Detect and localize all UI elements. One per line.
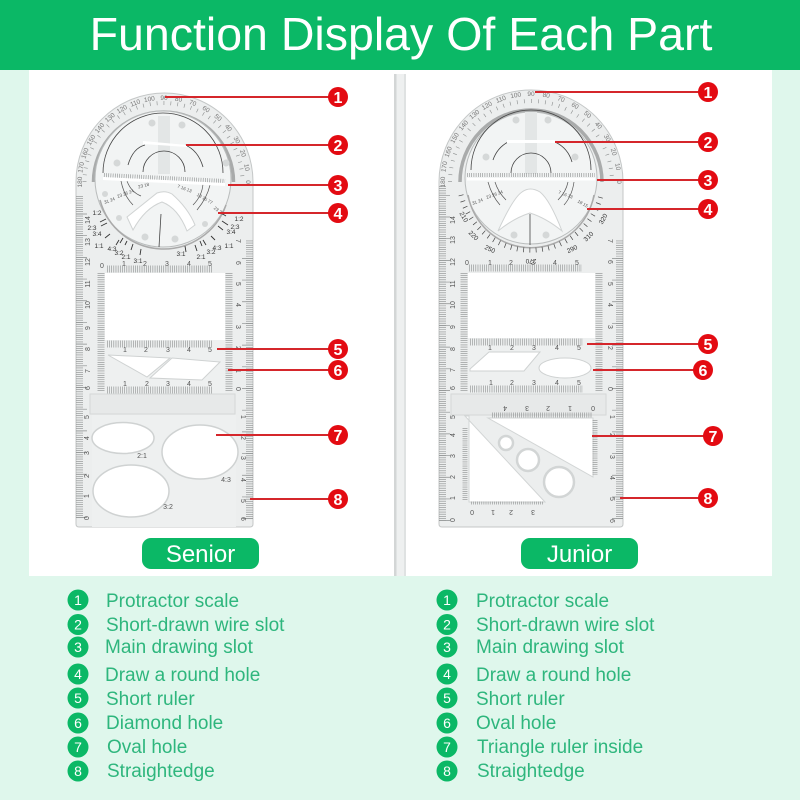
inner arcs and slots: 23 26 24 bbox=[485, 189, 504, 200]
protractor numbers: 160 bbox=[80, 147, 91, 160]
side scales: 7 bbox=[606, 239, 613, 243]
item 1: Protractor scale bbox=[106, 591, 239, 612]
protractor numbers: 0 bbox=[615, 180, 622, 184]
side scales: 1 bbox=[234, 369, 241, 373]
triangle ruler inside: 2 bbox=[509, 508, 513, 515]
protractor numbers: 140 bbox=[458, 119, 470, 132]
window with rulers: 4 bbox=[553, 260, 557, 267]
elliptical holes: 3:2 bbox=[163, 504, 173, 511]
item 3: 3 bbox=[443, 639, 451, 655]
protractor numbers: 0 bbox=[244, 180, 251, 184]
item 3: 3 bbox=[74, 639, 82, 655]
item 3: Main drawing slot bbox=[105, 637, 254, 658]
window with rulers: 0 bbox=[591, 404, 595, 411]
protractor numbers: 50 bbox=[582, 110, 593, 120]
callout 3: 3 bbox=[704, 173, 713, 190]
ratio labels: 2:3 bbox=[230, 224, 240, 231]
protractor numbers: 90 bbox=[527, 91, 535, 98]
callout 3: 3 bbox=[334, 178, 343, 195]
side scales: 1 bbox=[84, 494, 91, 498]
ratio labels: 1:2 bbox=[92, 210, 102, 217]
item 4: Draw a round hole bbox=[105, 665, 260, 686]
item 7: Oval hole bbox=[107, 737, 187, 758]
side scales: 13 bbox=[450, 236, 457, 244]
side scales: 12 bbox=[85, 258, 92, 266]
inner arcs and slots: 23 26 24 bbox=[116, 188, 135, 199]
item 8: 8 bbox=[443, 763, 451, 779]
callout 6: 6 bbox=[699, 363, 708, 380]
protractor numbers bbox=[440, 91, 622, 187]
callout 2: 2 bbox=[334, 138, 343, 155]
window with rulers: 2 bbox=[510, 380, 514, 387]
window with rulers: 5 bbox=[208, 261, 212, 268]
protractor numbers: 90 bbox=[160, 95, 168, 102]
callout 2 bbox=[186, 135, 348, 155]
window with rulers: 4 bbox=[555, 345, 559, 352]
callout 5 bbox=[587, 334, 718, 354]
side scales: 14 bbox=[85, 216, 92, 224]
protractor numbers: 100 bbox=[510, 91, 522, 100]
side scales: 2 bbox=[239, 436, 246, 440]
protractor numbers: 120 bbox=[481, 100, 494, 112]
ratio labels: 1:2 bbox=[234, 216, 244, 223]
item 6 bbox=[436, 712, 556, 734]
protractor numbers: 40 bbox=[223, 123, 233, 134]
side scales: 6 bbox=[239, 517, 246, 521]
side scales bbox=[442, 186, 620, 523]
protractor numbers: 80 bbox=[542, 92, 551, 100]
side scales: 8 bbox=[450, 347, 457, 351]
protractor numbers: 130 bbox=[104, 112, 117, 124]
ratio labels: 4:3 bbox=[212, 245, 222, 252]
side scales: 2 bbox=[606, 346, 613, 350]
protractor numbers: 60 bbox=[570, 101, 580, 111]
inner arcs and slots bbox=[467, 110, 595, 248]
callout 2 bbox=[555, 132, 718, 152]
callout 1 bbox=[535, 82, 718, 102]
callouts: junior bbox=[535, 82, 723, 508]
item 5 bbox=[436, 688, 565, 710]
item 4: Draw a round hole bbox=[476, 665, 631, 686]
window with rulers: 3 bbox=[166, 381, 170, 388]
side scales: 9 bbox=[85, 326, 92, 330]
side scales: 0 bbox=[234, 387, 241, 391]
side scales: 11 bbox=[450, 280, 457, 288]
callout 5: 5 bbox=[334, 342, 343, 359]
side scales: 2 bbox=[450, 475, 457, 479]
item 7: 7 bbox=[443, 739, 451, 755]
callout 4: 4 bbox=[704, 202, 713, 219]
protractor numbers: 170 bbox=[440, 160, 449, 173]
side scales: 5 bbox=[234, 282, 241, 286]
protractor numbers: 50 bbox=[213, 113, 223, 123]
window with rulers: 2 bbox=[145, 381, 149, 388]
triangle ruler inside: 3 bbox=[531, 508, 535, 515]
elliptical holes: 4:3 bbox=[221, 477, 231, 484]
triangle ruler inside: 0 bbox=[470, 508, 474, 515]
item 1: Protractor scale bbox=[476, 591, 609, 612]
protractor numbers: 170 bbox=[77, 161, 86, 173]
item 7: 7 bbox=[74, 739, 82, 755]
protractor numbers: 60 bbox=[201, 105, 211, 115]
header banner bbox=[0, 0, 800, 70]
side scales: 6 bbox=[234, 261, 241, 265]
side scales: 3 bbox=[239, 456, 246, 460]
item 1: 1 bbox=[443, 592, 451, 608]
side scales: 3 bbox=[450, 454, 457, 458]
side scales: 4 bbox=[608, 476, 615, 480]
ratio labels: 3:4 bbox=[226, 229, 236, 236]
side scales bbox=[80, 196, 250, 521]
side scales: 5 bbox=[84, 415, 91, 419]
callout 4 bbox=[587, 199, 718, 219]
protractor numbers: 40 bbox=[593, 121, 603, 131]
window with rulers: 4 bbox=[187, 261, 191, 268]
side scales: 3 bbox=[234, 325, 241, 329]
protractor numbers: 70 bbox=[556, 95, 566, 104]
inner arcs and slots: 18 15 77 bbox=[196, 192, 214, 205]
item 2: Short-drawn wire slot bbox=[476, 615, 655, 636]
side scales: 1 bbox=[450, 496, 457, 500]
side scales: 4 bbox=[84, 436, 91, 440]
window with rulers: 3 bbox=[165, 261, 169, 268]
item 4: 4 bbox=[443, 666, 451, 682]
ratio labels: 4:3 bbox=[107, 246, 117, 253]
protractor numbers: 100 bbox=[144, 95, 156, 104]
legend: junior bbox=[436, 590, 655, 782]
inner arcs and slots: 31 24 bbox=[103, 196, 116, 205]
lower degree scale: 310 bbox=[583, 230, 596, 243]
window with rulers: 3 bbox=[532, 380, 536, 387]
lower degree scale: 290 bbox=[566, 244, 579, 255]
callout 6 bbox=[228, 360, 348, 380]
item 2: 2 bbox=[74, 616, 82, 632]
ratio labels: 3:2 bbox=[206, 249, 216, 256]
item 8: Straightedge bbox=[477, 761, 585, 782]
side scales: 7 bbox=[450, 368, 457, 372]
side scales: 8 bbox=[85, 347, 92, 351]
window with rulers: 4 bbox=[503, 404, 507, 411]
callout 5: 5 bbox=[704, 337, 713, 354]
side scales: 7 bbox=[234, 239, 241, 243]
window with rulers: 1 bbox=[489, 380, 493, 387]
window with rulers: 1 bbox=[123, 381, 127, 388]
window with rulers: 2 bbox=[546, 404, 550, 411]
label: Senior bbox=[142, 538, 259, 569]
protractor numbers: 70 bbox=[188, 99, 198, 108]
protractor numbers: 180 bbox=[440, 176, 447, 187]
item 6: Diamond hole bbox=[106, 713, 223, 734]
side scales: 7 bbox=[85, 369, 92, 373]
side scales: 13 bbox=[85, 238, 92, 246]
side scales: 10 bbox=[85, 301, 92, 309]
window with rulers: 1 bbox=[123, 347, 127, 354]
window with rulers: 3 bbox=[525, 404, 529, 411]
protractor numbers: 20 bbox=[238, 149, 247, 158]
callout 1: 1 bbox=[704, 85, 713, 102]
window with rulers: 4 bbox=[187, 381, 191, 388]
protractor numbers: 30 bbox=[231, 135, 241, 145]
callouts: senior bbox=[165, 87, 348, 509]
item 7: Triangle ruler inside bbox=[477, 737, 643, 758]
item 6: 6 bbox=[443, 715, 451, 731]
item 5 bbox=[68, 688, 195, 710]
ruler: junior bbox=[439, 90, 623, 527]
protractor numbers: 110 bbox=[495, 95, 507, 105]
window with rulers: 1 bbox=[488, 260, 492, 267]
callout 6: 6 bbox=[334, 363, 343, 380]
protractor numbers: 130 bbox=[468, 109, 481, 121]
label: Junior bbox=[521, 538, 638, 569]
item 2: 2 bbox=[443, 616, 451, 632]
side scales: 0 bbox=[450, 518, 457, 522]
item 5: 5 bbox=[443, 690, 451, 706]
side scales: 1 bbox=[239, 415, 246, 419]
panel: white product area bbox=[29, 70, 772, 576]
callout 4: 4 bbox=[334, 206, 343, 223]
window with rulers: 0 bbox=[465, 260, 469, 267]
protractor numbers: 30 bbox=[602, 133, 612, 143]
window with rulers bbox=[90, 261, 235, 414]
side scales: 2 bbox=[234, 346, 241, 350]
window with rulers: 1 bbox=[568, 404, 572, 411]
protractor numbers: 180 bbox=[77, 176, 84, 187]
callout 8 bbox=[250, 489, 348, 509]
lower degree scale: 270 bbox=[525, 257, 536, 264]
protractor numbers: 80 bbox=[174, 96, 183, 104]
callout 3 bbox=[228, 175, 348, 195]
side scales: 14 bbox=[450, 216, 457, 224]
item 5: Short ruler bbox=[106, 689, 195, 710]
window with rulers: 1 bbox=[488, 345, 492, 352]
side scales: 0 bbox=[606, 387, 613, 391]
window with rulers: 4 bbox=[187, 347, 191, 354]
callout 7 bbox=[216, 425, 348, 445]
protractor numbers: 150 bbox=[449, 131, 461, 145]
protractor numbers: 10 bbox=[242, 163, 250, 172]
window with rulers: 5 bbox=[208, 347, 212, 354]
protractor numbers: 120 bbox=[116, 104, 129, 115]
triangle ruler inside bbox=[465, 415, 595, 515]
window with rulers: 3 bbox=[531, 260, 535, 267]
side scales: 10 bbox=[450, 301, 457, 309]
side scales: 3 bbox=[606, 325, 613, 329]
protractor numbers: 160 bbox=[444, 145, 454, 158]
item 5: Short ruler bbox=[476, 689, 565, 710]
side scales: 5 bbox=[450, 415, 457, 419]
callout 8: 8 bbox=[704, 491, 713, 508]
callout 7: 7 bbox=[709, 429, 718, 446]
header banner: Function Display Of Each Part bbox=[90, 8, 712, 60]
side scales: 4 bbox=[234, 303, 241, 307]
window with rulers bbox=[451, 260, 606, 415]
protractor numbers: 10 bbox=[613, 163, 621, 171]
callout 8 bbox=[620, 488, 718, 508]
protractor numbers: 140 bbox=[94, 122, 106, 135]
ratio labels: 2:1 bbox=[121, 254, 131, 261]
window with rulers: 2 bbox=[144, 347, 148, 354]
window with rulers: 2 bbox=[143, 261, 147, 268]
side scales: 5 bbox=[608, 497, 615, 501]
window with rulers: 2 bbox=[509, 260, 513, 267]
callout 7 bbox=[592, 426, 723, 446]
window with rulers: 5 bbox=[577, 380, 581, 387]
callout 4 bbox=[218, 203, 348, 223]
side scales: 0 bbox=[84, 516, 91, 520]
item 8: Straightedge bbox=[107, 761, 215, 782]
side scales: 4 bbox=[450, 433, 457, 437]
callout 5 bbox=[217, 339, 348, 359]
ratio labels: 1:1 bbox=[224, 243, 234, 250]
lower degree scale: 250 bbox=[483, 244, 496, 255]
label: Junior: Junior bbox=[547, 541, 612, 568]
label: Senior: Senior bbox=[166, 541, 235, 568]
triangle ruler inside: 1 bbox=[491, 508, 495, 515]
ratio labels: 3:1 bbox=[133, 258, 143, 265]
item 6: 6 bbox=[74, 715, 82, 731]
item 7 bbox=[68, 736, 187, 758]
callout 3 bbox=[597, 170, 718, 190]
callout 1 bbox=[165, 87, 348, 107]
window with rulers: 2 bbox=[510, 345, 514, 352]
ratio labels: 2:1 bbox=[196, 254, 206, 261]
side scales: 5 bbox=[239, 499, 246, 503]
inner arcs and slots: 7 16 13 bbox=[177, 184, 193, 194]
side scales: 3 bbox=[608, 455, 615, 459]
side scales: 2 bbox=[608, 433, 615, 437]
ruler: senior bbox=[76, 93, 253, 527]
ratio labels bbox=[87, 210, 244, 265]
window with rulers: 4 bbox=[555, 380, 559, 387]
inner arcs and slots: 31 24 bbox=[471, 197, 484, 206]
inner arcs and slots: 23 18 bbox=[138, 182, 150, 189]
legend: senior bbox=[68, 590, 285, 782]
callout 8: 8 bbox=[334, 492, 343, 509]
item 8: 8 bbox=[74, 763, 82, 779]
inner arcs and slots: 7 16 13 bbox=[558, 190, 574, 200]
window with rulers: 5 bbox=[208, 381, 212, 388]
side scales: 6 bbox=[606, 260, 613, 264]
window with rulers: 1 bbox=[122, 261, 126, 268]
window with rulers: 5 bbox=[577, 345, 581, 352]
protractor numbers: 110 bbox=[129, 98, 142, 109]
item 3: Main drawing slot bbox=[476, 637, 625, 658]
side scales: 9 bbox=[450, 325, 457, 329]
window with rulers: 0 bbox=[100, 263, 104, 270]
side scales: 4 bbox=[239, 478, 246, 482]
side scales: 6 bbox=[450, 386, 457, 390]
inner arcs and slots: 23 26 bbox=[213, 205, 225, 216]
ratio labels: 3:1 bbox=[176, 251, 186, 258]
side scales: 6 bbox=[85, 386, 92, 390]
callout 2: 2 bbox=[704, 135, 713, 152]
side scales: 1 bbox=[608, 415, 615, 419]
ratio labels: 2:3 bbox=[87, 225, 97, 232]
callout 6 bbox=[593, 360, 713, 380]
side scales: 12 bbox=[450, 258, 457, 266]
item 2: Short-drawn wire slot bbox=[106, 615, 285, 636]
window with rulers: 5 bbox=[575, 260, 579, 267]
item 1: 1 bbox=[74, 592, 82, 608]
ratio labels: 1:1 bbox=[94, 243, 104, 250]
protractor numbers: 150 bbox=[86, 133, 98, 147]
callout 7: 7 bbox=[334, 428, 343, 445]
side scales: 11 bbox=[85, 280, 92, 288]
inner arcs and slots bbox=[100, 113, 230, 249]
elliptical holes: 2:1 bbox=[137, 453, 147, 460]
ratio labels: 3:2 bbox=[114, 250, 124, 257]
ratio labels: 3:4 bbox=[92, 231, 102, 238]
elliptical holes bbox=[92, 415, 238, 527]
side scales: 5 bbox=[606, 282, 613, 286]
window with rulers: 3 bbox=[532, 345, 536, 352]
item 4: 4 bbox=[74, 666, 82, 682]
inner arcs and slots: 18 15 bbox=[577, 199, 589, 209]
lower degree scale bbox=[458, 195, 610, 264]
item 6: Oval hole bbox=[476, 713, 556, 734]
lower degree scale: 220 bbox=[467, 230, 480, 243]
protractor numbers bbox=[77, 95, 251, 187]
side scales: 2 bbox=[84, 474, 91, 478]
lower degree scale: 320 bbox=[598, 212, 610, 226]
side scales: 3 bbox=[84, 451, 91, 455]
window with rulers: 3 bbox=[166, 347, 170, 354]
side scales: 6 bbox=[608, 519, 615, 523]
item 5: 5 bbox=[74, 690, 82, 706]
side scales: 4 bbox=[606, 303, 613, 307]
lower degree scale: 210 bbox=[458, 211, 469, 224]
protractor numbers: 20 bbox=[609, 147, 618, 157]
callout 1: 1 bbox=[334, 90, 343, 107]
